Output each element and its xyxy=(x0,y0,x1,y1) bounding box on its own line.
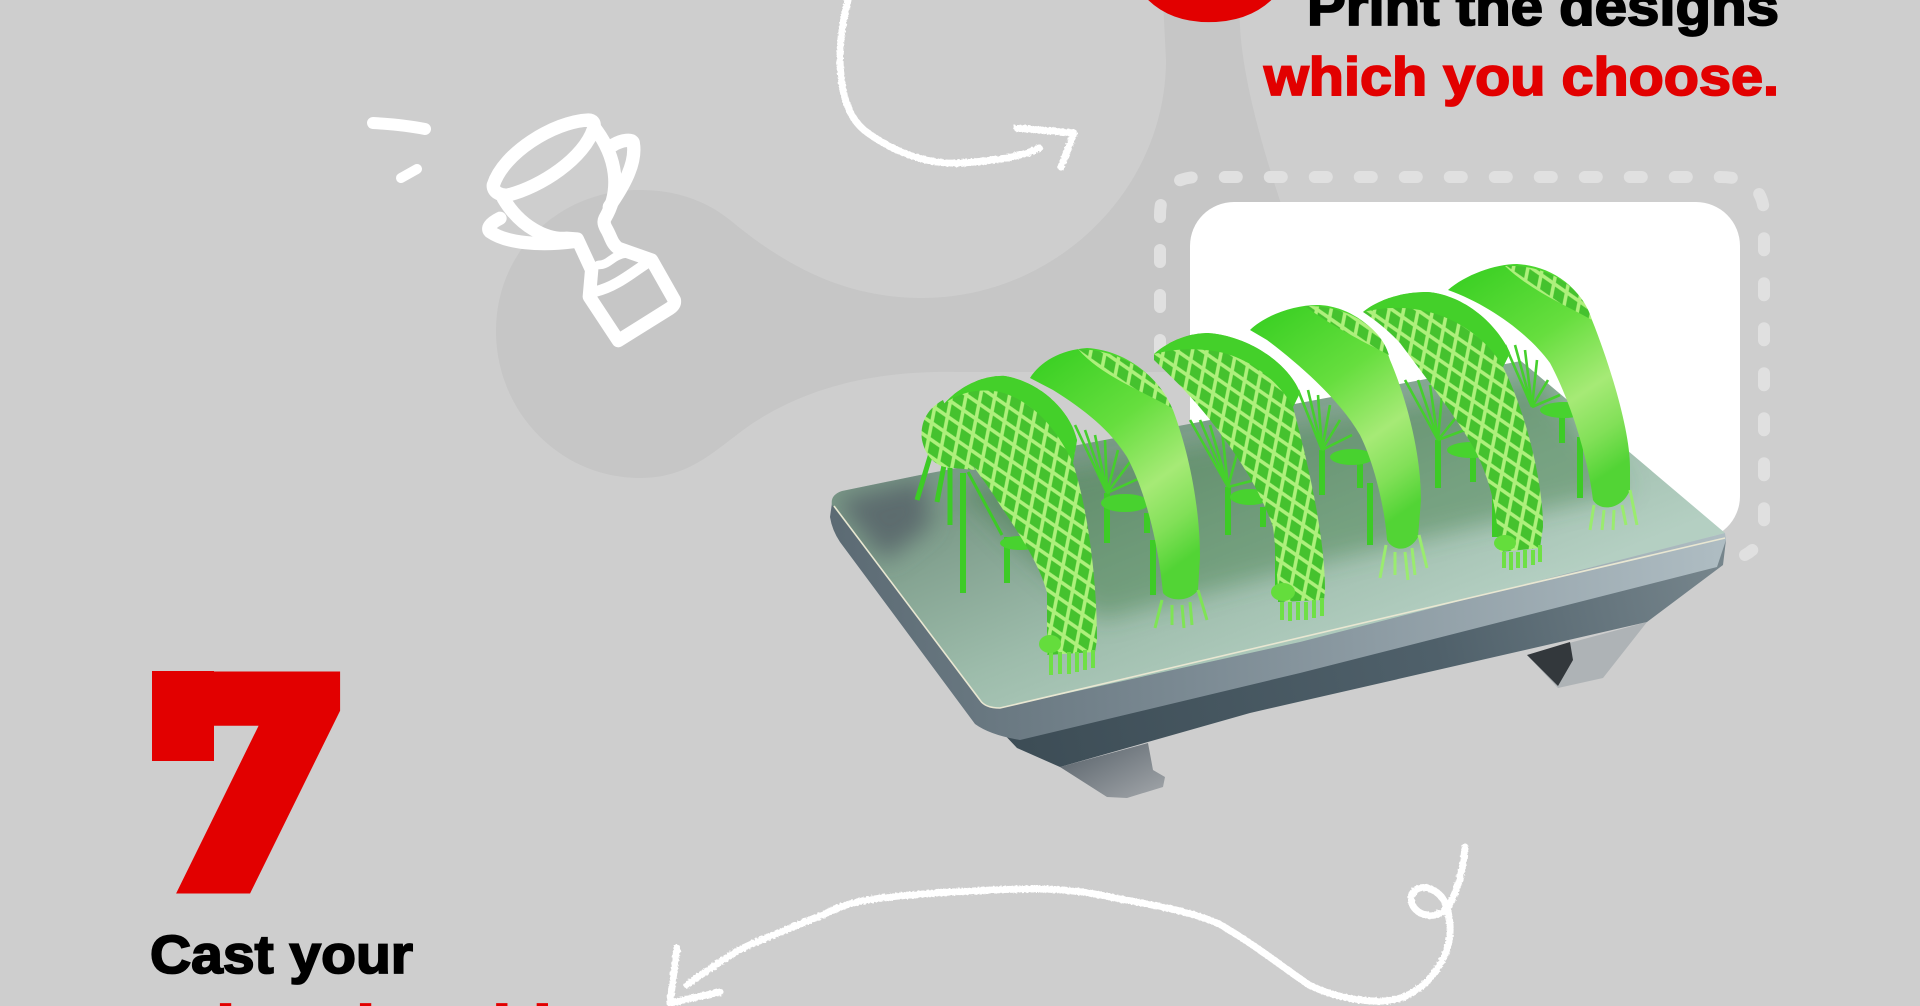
step 6 caption xyxy=(1263,0,1779,107)
plate underside xyxy=(1000,540,1726,767)
trophy icon xyxy=(489,120,674,341)
arch 3 lattice xyxy=(1154,333,1325,621)
left foot xyxy=(1060,743,1165,798)
plate rim highlight xyxy=(834,506,1725,708)
right foot xyxy=(1527,622,1647,688)
dotted frame xyxy=(1160,177,1764,555)
step 6 caption: which you choose. xyxy=(1263,47,1779,107)
arch 2 solid xyxy=(1030,348,1207,628)
arch 1 back lattice xyxy=(922,400,975,470)
step 7 number: 7 xyxy=(143,623,356,953)
arch 6 solid xyxy=(1448,264,1637,530)
support pads xyxy=(1000,402,1588,550)
step 7 caption: Cast your xyxy=(150,925,413,985)
plate side band xyxy=(830,503,1726,740)
background blob xyxy=(496,0,1290,478)
arch 5 lattice xyxy=(1363,292,1543,570)
support posts xyxy=(917,417,1580,595)
plate shadows xyxy=(835,380,1630,620)
support fans xyxy=(1075,345,1560,493)
curved arrow top xyxy=(840,0,1074,167)
arch 1 lattice xyxy=(943,376,1097,675)
step 7 caption xyxy=(150,925,570,1006)
sparkle marks xyxy=(373,123,425,178)
arch 4 solid xyxy=(1250,305,1427,580)
white card xyxy=(1190,202,1740,540)
build plate with printed arches xyxy=(830,264,1726,798)
curved arrow bottom xyxy=(670,847,1465,1003)
plate top xyxy=(832,361,1725,708)
